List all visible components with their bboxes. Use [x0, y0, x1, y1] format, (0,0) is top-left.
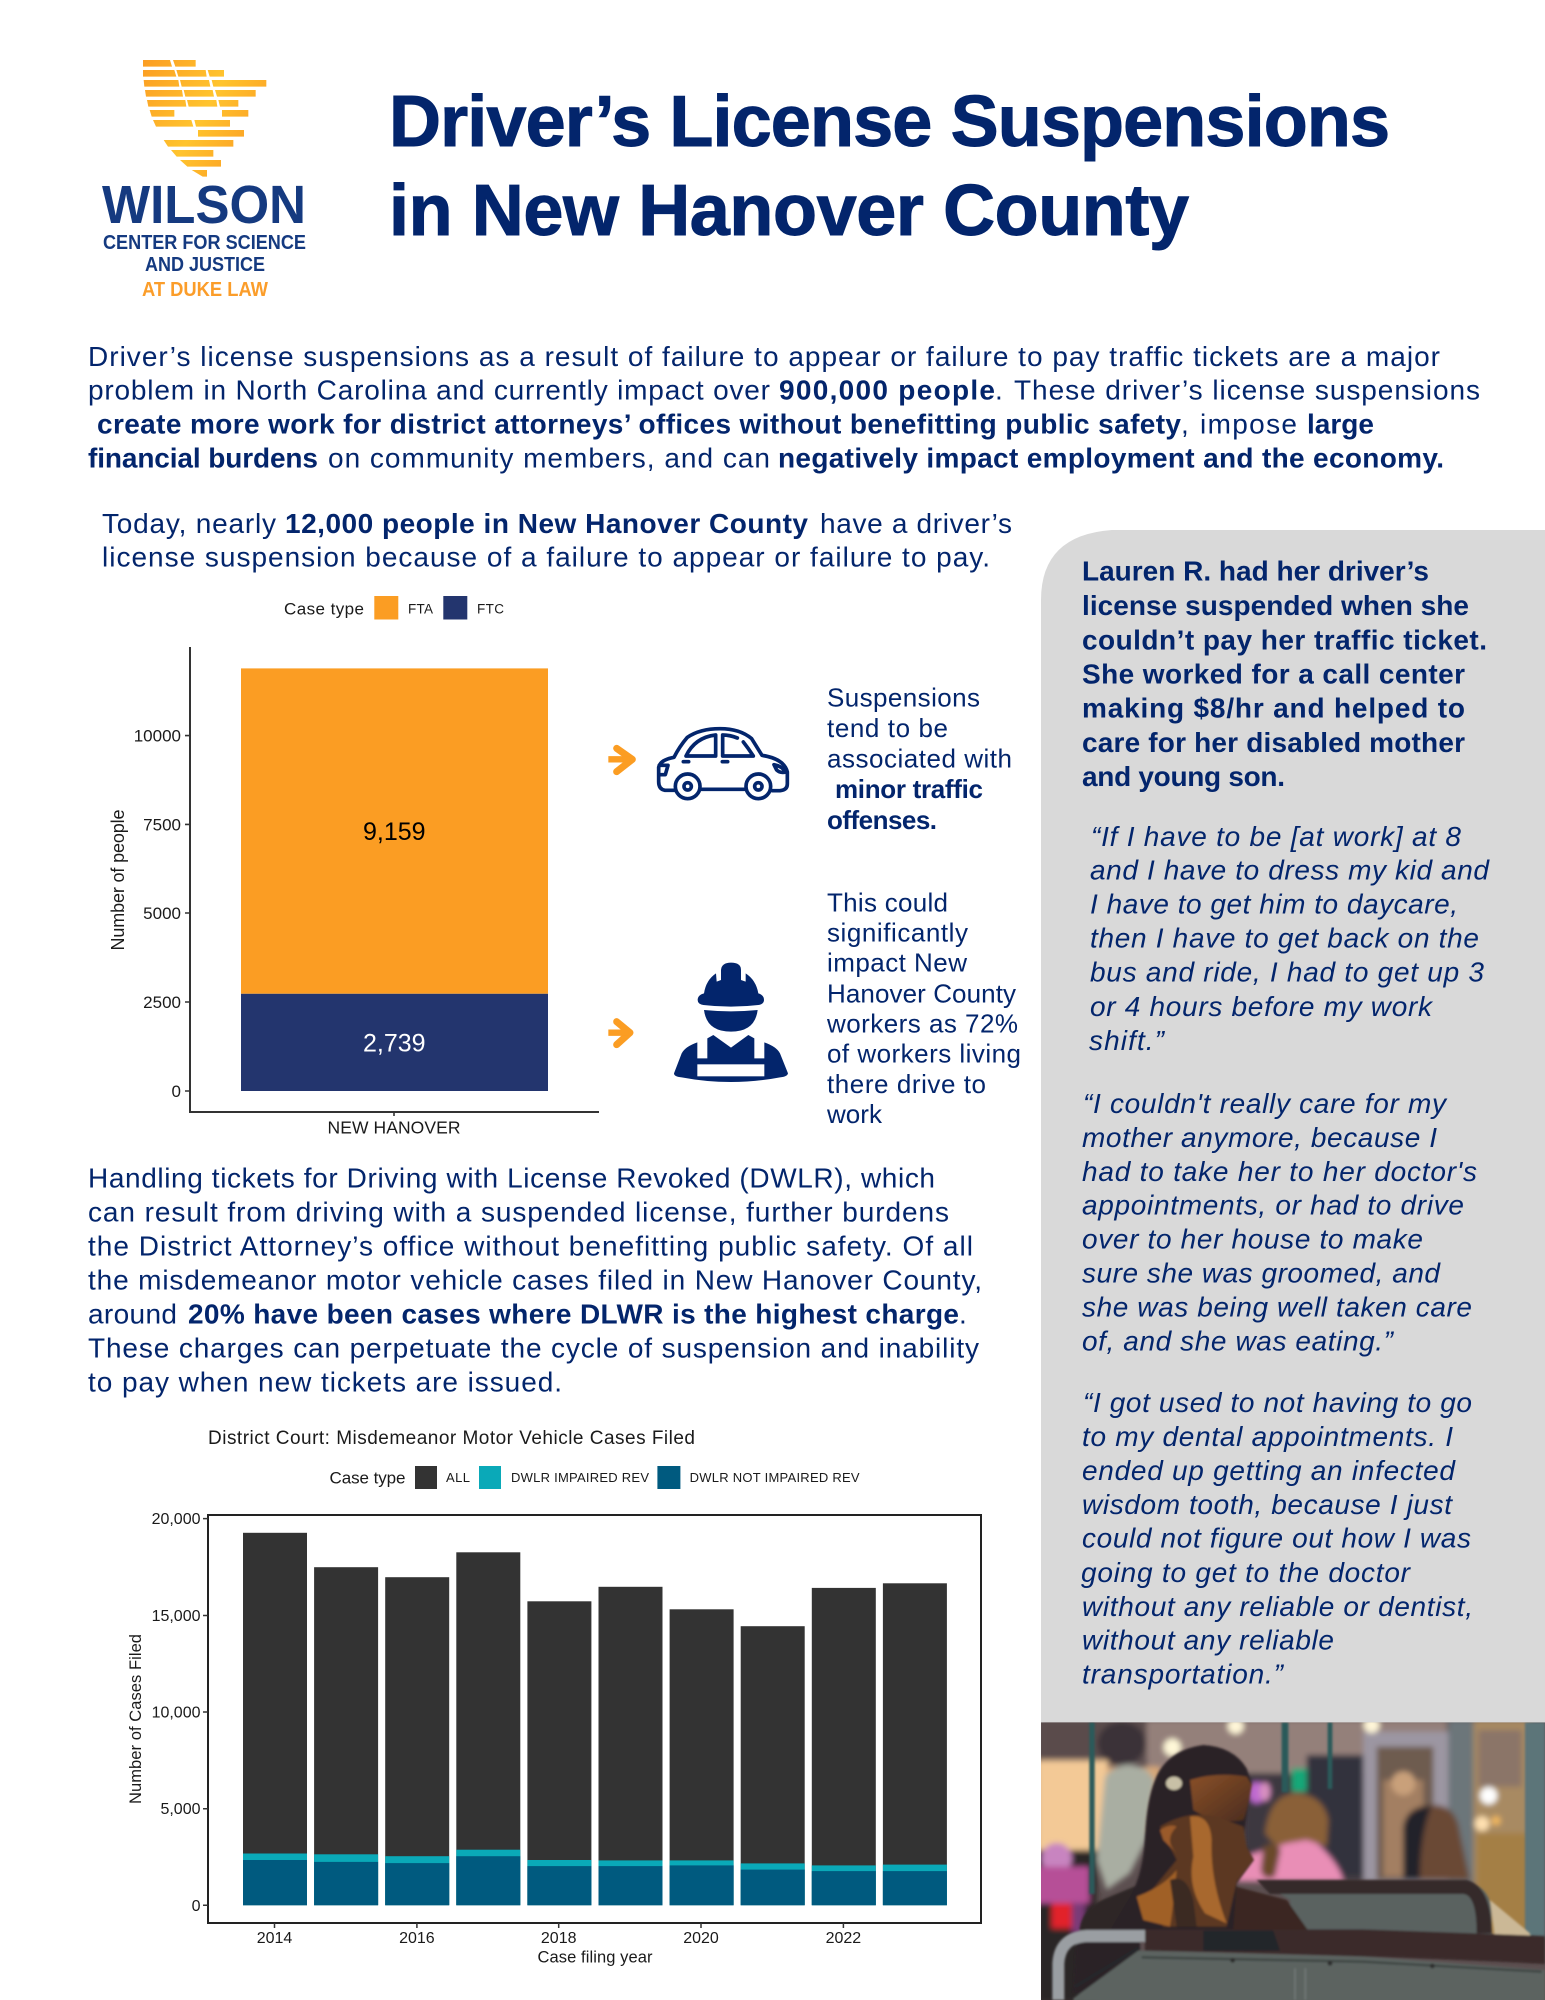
paragraph: DWLR burden: around [88, 1298, 177, 1330]
poles [1089, 1722, 1545, 1939]
text: impact on workers: workers as 72% [826, 1008, 1018, 1038]
paragraph: DWLR burden: These charges can perpetuate the cycle of suspension and inability [88, 1332, 979, 1364]
statement: 12,000 people in New Hanover County [102, 508, 1012, 572]
intro paragraph: 900,000 people [779, 374, 995, 406]
bar segment: FTC 2,739: 2,739 [363, 1030, 426, 1058]
quote: caring for mother: mother anymore, because I [1082, 1122, 1437, 1153]
text: minor traffic offenses: associated with [827, 744, 1012, 774]
paragraph: DWLR burden: Handling tickets for Driving with License Revoked (DWLR), which [88, 1162, 935, 1194]
stacked bar chart: suspensions by case type [108, 596, 599, 1138]
story introduction [1082, 556, 1487, 792]
text: impact on workers: of workers living [827, 1038, 1021, 1068]
quote: getting to work: then I have to get back on the [1090, 922, 1479, 954]
story introduction: making $8/hr and helped to [1082, 692, 1465, 724]
text: impact on workers: there drive to [827, 1069, 986, 1099]
paragraph: DWLR burden: can result from driving with a suspended license, further burdens [88, 1196, 949, 1228]
bar segment: FTC 2,739 [241, 994, 548, 1091]
intro paragraph: Driver’s license suspensions as a result of failure to appear or failure to pay traffic tickets are a major [88, 341, 1440, 372]
intro paragraph: impose [1200, 408, 1297, 440]
chart legend: DWLR NOT IMPAIRED REV [690, 1470, 860, 1485]
text: impact on workers: Hanover County [827, 978, 1016, 1008]
blurred background [1037, 1717, 1530, 2000]
story introduction: license suspended when she [1082, 590, 1469, 621]
quote: getting to work: “If I have to be [at work] at 8 [1091, 821, 1461, 852]
chart frame and axes: 2016 [399, 1930, 435, 1947]
icon: construction worker [674, 963, 788, 1082]
chart legend: Case type [284, 600, 364, 618]
seats and passenger [1058, 1745, 1545, 2000]
quote: dental appointments: going to get to the doctor [1081, 1557, 1412, 1588]
bar chart: misdemeanor motor vehicle cases filed [127, 1428, 981, 1967]
statement: 12,000 people in New Hanover County: have a driver’s [820, 508, 1012, 539]
chart frame and axes: 2022 [826, 1930, 861, 1947]
icon: car [659, 729, 787, 799]
chart axes and ticks: 0 [172, 1082, 181, 1101]
intro paragraph: financial burdens [88, 442, 318, 474]
chart axes and ticks [108, 647, 599, 1138]
chart frame and axes: 2014 [257, 1930, 292, 1947]
chart axes and ticks: Number of people [108, 810, 128, 950]
quote: dental appointments: could not figure out how I was [1082, 1522, 1471, 1554]
intro paragraph: These driver’s license suspensions [1014, 374, 1480, 406]
chart frame and axes [127, 1511, 981, 1967]
text: impact on workers: significantly [827, 918, 968, 948]
arrow: to worker [608, 1022, 630, 1045]
statement: 12,000 people in New Hanover County: Today, nearly [102, 508, 276, 539]
logo mark: striped shield [143, 60, 266, 177]
paragraph: DWLR burden: the misdemeanor motor vehicle cases filed in New Hanover County, [88, 1264, 982, 1296]
arrow: to car [608, 748, 632, 772]
chart legend [284, 596, 504, 620]
chart frame and axes: 0 [192, 1898, 201, 1915]
bars: all cases [243, 1533, 947, 1905]
chart frame and axes: Case filing year [538, 1949, 653, 1967]
bars: DWLR not impaired revoked [243, 1856, 947, 1905]
chart legend: Case type [330, 1468, 406, 1487]
quote: dental appointments: without any reliable [1082, 1624, 1334, 1656]
intro paragraph [88, 341, 1480, 474]
logo: Wilson Center for Science and Justice [102, 60, 306, 301]
paragraph: DWLR burden: the District Attorney’s office without benefitting public safety. Of all [88, 1230, 973, 1262]
quote: dental appointments: “I got used to not having to go [1083, 1387, 1472, 1418]
intro paragraph: . [995, 374, 1003, 406]
chart axes and ticks: NEW HANOVER [328, 1118, 460, 1138]
statement: 12,000 people in New Hanover County: license suspension because of a failure to appear or failure to pay. [102, 542, 990, 572]
quote: caring for mother [1082, 1088, 1477, 1356]
quote: dental appointments: without any reliable or dentist, [1082, 1591, 1473, 1622]
chart title: District Court: Misdemeanor Motor Vehicle Cases Filed [208, 1428, 695, 1449]
chart legend [330, 1466, 860, 1489]
bar segment: FTA 9,159 [241, 668, 548, 994]
text: minor traffic offenses [827, 682, 1012, 835]
logo: Wilson Center for Science and Justice: AND JUSTICE [145, 254, 265, 276]
photo: woman riding a bus [1037, 1717, 1545, 2000]
quote: caring for mother: appointments, or had to drive [1082, 1190, 1464, 1220]
chart frame and axes: 15,000 [152, 1608, 201, 1625]
bar segment: FTA 9,159: 9,159 [363, 818, 426, 846]
text: impact on workers: This could [827, 888, 948, 918]
text: minor traffic offenses: offenses. [827, 805, 937, 835]
quote: getting to work: or 4 hours before my work [1090, 991, 1434, 1022]
quote: getting to work: and I have to dress my kid and [1090, 854, 1490, 886]
quote: caring for mother: had to take her to her doctor's [1082, 1156, 1477, 1187]
chart frame and axes: 5,000 [160, 1801, 201, 1818]
quote: caring for mother: sure she was groomed, and [1082, 1258, 1441, 1288]
panel background [1041, 530, 1545, 1725]
text: impact on workers [826, 888, 1021, 1129]
chart frame and axes: 10,000 [152, 1704, 201, 1722]
paragraph: DWLR burden: 20% have been cases where DLWR is the highest charge [188, 1298, 959, 1330]
paragraph: DWLR burden: . [959, 1298, 967, 1330]
bars: DWLR impaired revoked [243, 1850, 947, 1905]
quote: getting to work: I have to get him to daycare, [1090, 888, 1458, 920]
title: in New Hanover County [389, 171, 1189, 251]
story introduction: She worked for a call center [1082, 658, 1465, 690]
logo: Wilson Center for Science and Justice: AT DUKE LAW [142, 279, 268, 301]
chart legend: FTA [408, 602, 433, 616]
quote: dental appointments: wisdom tooth, because I just [1082, 1489, 1453, 1520]
text: impact on workers: impact New [827, 948, 967, 978]
title [389, 82, 1390, 251]
quote: getting to work: shift.” [1089, 1025, 1166, 1056]
chart frame and axes: 2018 [541, 1930, 577, 1947]
paragraph: DWLR burden [88, 1162, 982, 1398]
statement: 12,000 people in New Hanover County: 12,000 people in New Hanover County [285, 508, 808, 539]
chart axes and ticks: 2500 [143, 993, 181, 1012]
chart legend: FTC [477, 602, 504, 616]
story introduction: care for her disabled mother [1082, 727, 1465, 758]
panel: Lauren R. story [1041, 530, 1545, 1725]
story introduction: couldn’t pay her traffic ticket. [1082, 624, 1487, 656]
quote: dental appointments: to my dental appointments. I [1082, 1421, 1453, 1452]
chart frame and axes: 20,000 [152, 1511, 201, 1528]
intro paragraph: negatively impact employment and the economy. [778, 442, 1444, 474]
intro paragraph: on community members, and can [328, 442, 770, 474]
text: minor traffic offenses: Suspensions [827, 682, 980, 712]
paragraph: DWLR burden: to pay when new tickets are issued. [88, 1366, 562, 1398]
chart legend: DWLR IMPAIRED REV [511, 1470, 649, 1485]
quote: dental appointments [1081, 1387, 1473, 1690]
quote: caring for mother: over to her house to make [1082, 1224, 1423, 1254]
quote: caring for mother: she was being well taken care [1082, 1292, 1472, 1322]
quote: caring for mother: “I couldn't really care for my [1083, 1088, 1448, 1119]
logo wordmark: WILSON [102, 175, 306, 235]
chart frame and axes: Number of Cases Filed [127, 1634, 145, 1804]
quote: caring for mother: of, and she was eating.” [1082, 1326, 1395, 1356]
intro paragraph: problem in North Carolina and currently impact over [88, 374, 770, 406]
chart frame and axes: 2020 [683, 1930, 719, 1947]
text: impact on workers: work [826, 1099, 883, 1129]
text: minor traffic offenses: minor traffic [835, 774, 983, 804]
intro paragraph: large [1307, 408, 1374, 440]
story introduction: Lauren R. had her driver’s [1082, 556, 1429, 586]
intro paragraph: create more work for district attorneys’ offices without benefitting public safety [97, 408, 1181, 440]
chart axes and ticks: 7500 [143, 816, 181, 834]
quote: getting to work [1089, 821, 1490, 1056]
quote: dental appointments: ended up getting an infected [1082, 1455, 1456, 1486]
title: Driver’s License Suspensions [389, 82, 1390, 162]
text: minor traffic offenses: tend to be [827, 713, 948, 743]
chart axes and ticks: 10000 [134, 726, 181, 746]
intro paragraph: , [1181, 408, 1189, 440]
chart legend: ALL [446, 1470, 470, 1485]
story introduction: and young son. [1082, 761, 1285, 792]
quote: dental appointments: transportation.” [1082, 1658, 1285, 1690]
quote: getting to work: bus and ride, I had to get up 3 [1090, 956, 1484, 988]
chart axes and ticks: 5000 [143, 904, 181, 923]
logo: Wilson Center for Science and Justice: CENTER FOR SCIENCE [103, 232, 306, 254]
